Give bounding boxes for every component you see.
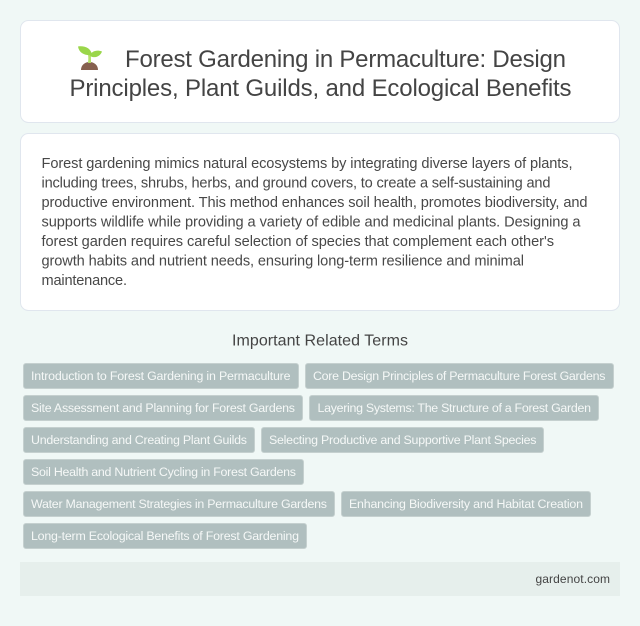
tag: water management: Water Management Strategies in Permaculture Gardens <box>31 497 327 511</box>
tag: biodiversity <box>342 492 590 516</box>
heading: title: Principles, Plant Guilds, and Ecological Benefits <box>70 75 572 102</box>
panel: introduction paragraph <box>20 134 620 310</box>
text block: paragraph: forest garden requires careful selection of species that complement each other's <box>42 234 554 250</box>
text block: paragraph: maintenance. <box>42 273 127 289</box>
heading: title: Forest Gardening in Permaculture: Design <box>125 46 566 73</box>
tag: plant guilds: Understanding and Creating Plant Guilds <box>31 433 247 447</box>
tag: soil health: Soil Health and Nutrient Cycling in Forest Gardens <box>31 465 296 479</box>
tag: biodiversity: Enhancing Biodiversity and Habitat Creation <box>349 497 583 511</box>
tag: plant species: Selecting Productive and Supportive Plant Species <box>269 433 536 447</box>
tag: plant species <box>262 428 544 452</box>
tag: water management <box>24 492 334 516</box>
tag: core design principles <box>306 364 614 388</box>
heading: title <box>70 46 572 102</box>
tag: core design principles: Core Design Principles of Permaculture Forest Gardens <box>313 369 606 383</box>
tag: ecological benefits <box>24 524 306 548</box>
heading: Important Related Terms: Important Related Terms <box>232 332 408 350</box>
text block: paragraph <box>42 156 588 289</box>
text block: paragraph: including trees, shrubs, herbs, and ground covers, to create a self-sustaining and <box>42 176 550 192</box>
tag: site assessment: Site Assessment and Planning for Forest Gardens <box>31 401 295 415</box>
tag: site assessment <box>24 396 302 420</box>
text block: paragraph: Forest gardening mimics natural ecosystems by integrating diverse layers of plants, <box>42 156 572 172</box>
text block: paragraph: supports wildlife while providing a variety of edible and medicinal plants. Designing a <box>42 214 581 230</box>
text block: paragraph: productive environment. This method enhances soil health, promotes biodiversity, and <box>42 195 588 211</box>
footer: source: gardenot.com <box>536 572 610 586</box>
text block: paragraph: growth habits and nutrient needs, ensuring long-term resilience and minimal <box>42 254 524 270</box>
tag: ecological benefits: Long-term Ecological Benefits of Forest Gardening <box>31 529 299 543</box>
tag: layering systems: Layering Systems: The Structure of a Forest Garden <box>318 401 591 415</box>
tag: soil health <box>24 460 304 484</box>
tag: plant guilds <box>24 428 254 452</box>
tag: introduction: Introduction to Forest Gardening in Permaculture <box>31 369 291 383</box>
panel: related term tags <box>24 364 614 548</box>
tag: introduction <box>24 364 298 388</box>
panel: title header <box>20 20 620 122</box>
tag: layering systems <box>310 396 598 420</box>
icon: sprout <box>78 46 102 70</box>
footer: source <box>20 562 620 596</box>
